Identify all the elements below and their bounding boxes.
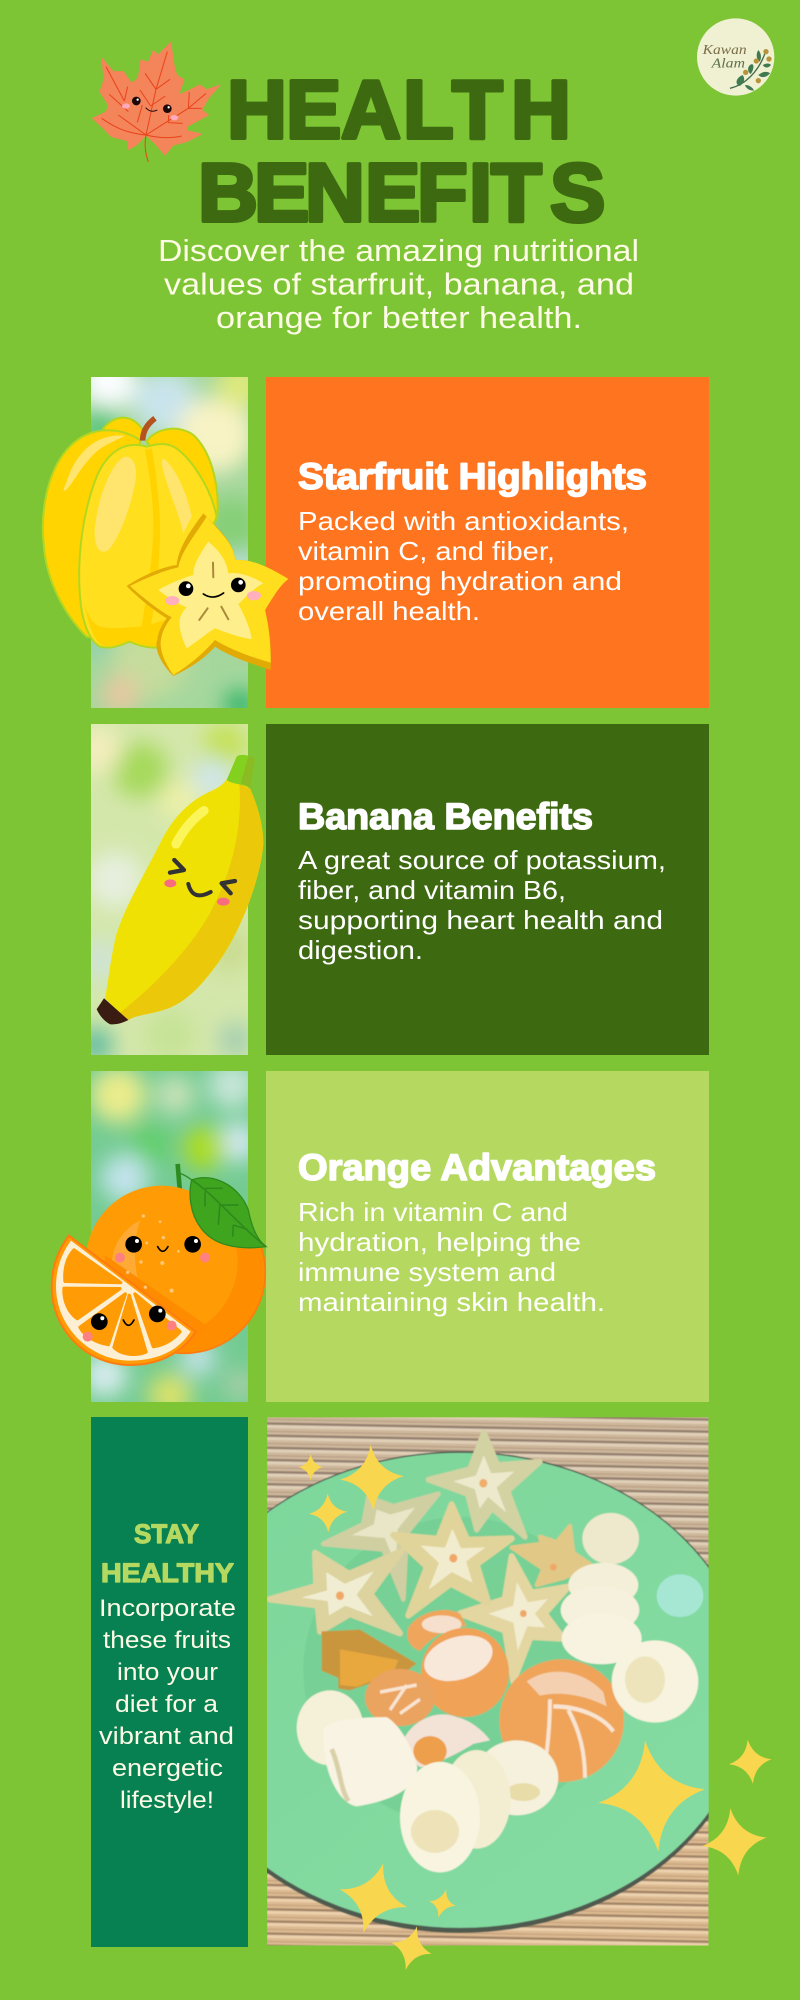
logo: Kawan Alam: Alam <box>711 55 745 70</box>
logo: Kawan Alam <box>697 18 774 96</box>
heading: stay healthy: HEALTHY <box>101 1558 234 1588</box>
text: stay healthy message: diet for a <box>115 1691 218 1718</box>
text: starfruit highlights: vitamin C, and fiber, <box>298 536 555 566</box>
subtitle: values of starfruit, banana, and <box>164 268 634 302</box>
panel: stay healthy <box>91 1417 248 1947</box>
text: stay healthy message: lifestyle! <box>120 1787 214 1814</box>
starfruit slices <box>270 1432 592 1690</box>
banana slices <box>297 1513 698 1872</box>
subtitle: Discover the amazing nutritional <box>158 234 639 268</box>
text: starfruit highlights: overall health. <box>298 596 480 626</box>
text: orange advantages <box>298 1147 656 1317</box>
icon: starfruit character <box>43 418 288 676</box>
icon: orange character <box>52 1164 266 1365</box>
bokeh image strip: banana <box>91 724 248 1055</box>
text: banana benefits: A great source of potassium, <box>298 845 666 875</box>
text: orange advantages: hydration, helping the <box>298 1227 581 1257</box>
text: banana benefits <box>298 796 666 965</box>
panel: starfruit highlights <box>266 377 709 708</box>
bokeh image strip: starfruit <box>91 377 248 708</box>
photo: plate and mat <box>267 1417 709 1946</box>
subtitle: orange for better health. <box>216 301 582 335</box>
text: orange advantages: Orange Advantages <box>298 1147 656 1188</box>
text: stay healthy message: vibrant and <box>99 1723 234 1750</box>
text: orange advantages: Rich in vitamin C and <box>298 1197 568 1227</box>
orange segments <box>365 1610 624 1782</box>
title: BENEFITS <box>198 146 605 239</box>
heading: stay healthy <box>101 1519 234 1588</box>
text: stay healthy message: Incorporate <box>99 1595 236 1622</box>
text: starfruit highlights: Starfruit Highlights <box>298 456 647 497</box>
panel: orange advantages <box>266 1071 709 1402</box>
text: stay healthy message: energetic <box>112 1755 223 1782</box>
heading: stay healthy: STAY <box>134 1519 199 1549</box>
icon: banana character <box>97 755 263 1024</box>
text: banana benefits: fiber, and vitamin B6, <box>298 875 566 905</box>
text: starfruit highlights: promoting hydration and <box>298 566 622 596</box>
text: stay healthy message: into your <box>117 1659 218 1686</box>
title: HEALTH <box>227 63 571 156</box>
photo: plate of fruit with sparkles <box>267 1417 772 1970</box>
sparkles <box>298 1443 774 1976</box>
text: starfruit highlights <box>298 456 647 626</box>
panel: banana benefits <box>266 724 709 1055</box>
text: stay healthy message: these fruits <box>103 1627 231 1654</box>
icon: smiling maple leaf <box>93 43 220 162</box>
text: orange advantages: immune system and <box>298 1257 556 1287</box>
title <box>198 63 605 239</box>
bokeh image strip: orange <box>91 1071 248 1402</box>
logo: Kawan Alam: Kawan <box>702 42 747 57</box>
text: banana benefits: digestion. <box>298 935 423 965</box>
text: starfruit highlights: Packed with antioxidants, <box>298 506 629 536</box>
text: stay healthy message <box>99 1595 236 1814</box>
text: banana benefits: Banana Benefits <box>298 796 593 837</box>
text: banana benefits: supporting heart health and <box>298 905 663 935</box>
subtitle <box>158 234 639 335</box>
text: orange advantages: maintaining skin health. <box>298 1287 605 1317</box>
